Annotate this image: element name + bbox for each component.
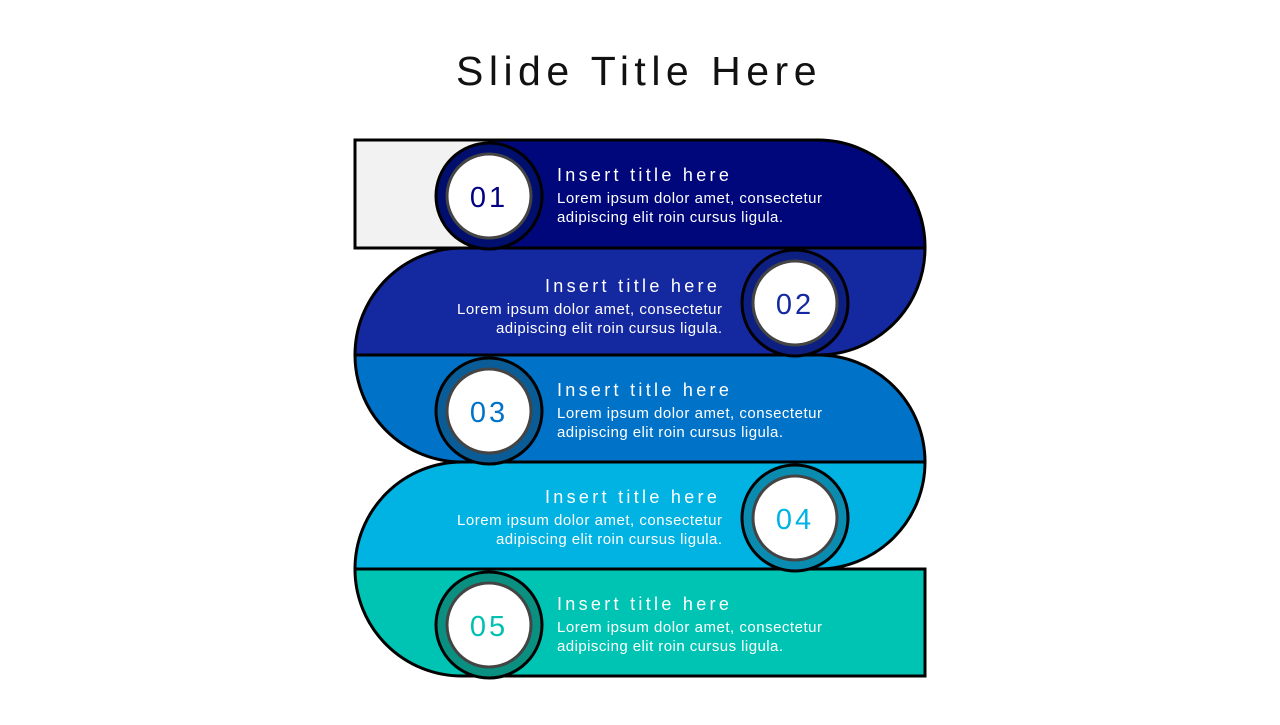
step 2: Lorem ipsum dolor amet, consectetur — [457, 301, 722, 318]
step 5: Lorem ipsum dolor amet, consectetur — [557, 619, 822, 636]
band 2 — [355, 248, 925, 355]
step 5 — [436, 572, 822, 678]
step 2 — [457, 250, 848, 356]
step 1: adipiscing elit roin cursus ligula. — [557, 209, 783, 226]
band 4 — [355, 462, 925, 569]
step 3: Lorem ipsum dolor amet, consectetur — [557, 405, 822, 422]
title: Slide Title Here — [456, 48, 822, 94]
step 5: 05 — [470, 611, 508, 643]
band 3 — [355, 355, 925, 462]
band 1 — [355, 140, 925, 248]
step 1: 01 — [470, 182, 508, 214]
step 3: Insert title here — [557, 380, 732, 400]
step 4: adipiscing elit roin cursus ligula. — [496, 531, 722, 548]
step 5: Insert title here — [557, 594, 732, 614]
step 1: Lorem ipsum dolor amet, consectetur — [557, 190, 822, 207]
step 2: 02 — [776, 289, 814, 321]
step 4 — [457, 465, 848, 571]
step 2: Insert title here — [545, 276, 720, 296]
gray tab — [355, 140, 489, 248]
step 3: adipiscing elit roin cursus ligula. — [557, 424, 783, 441]
band 5 — [355, 569, 925, 676]
step 3: 03 — [470, 397, 508, 429]
step 4: Insert title here — [545, 487, 720, 507]
step 2: adipiscing elit roin cursus ligula. — [496, 320, 722, 337]
step 4: 04 — [776, 504, 814, 536]
step 3 — [436, 358, 822, 464]
step 4: Lorem ipsum dolor amet, consectetur — [457, 512, 722, 529]
step 5: adipiscing elit roin cursus ligula. — [557, 638, 783, 655]
step 1 — [436, 143, 822, 249]
step 1: Insert title here — [557, 165, 732, 185]
